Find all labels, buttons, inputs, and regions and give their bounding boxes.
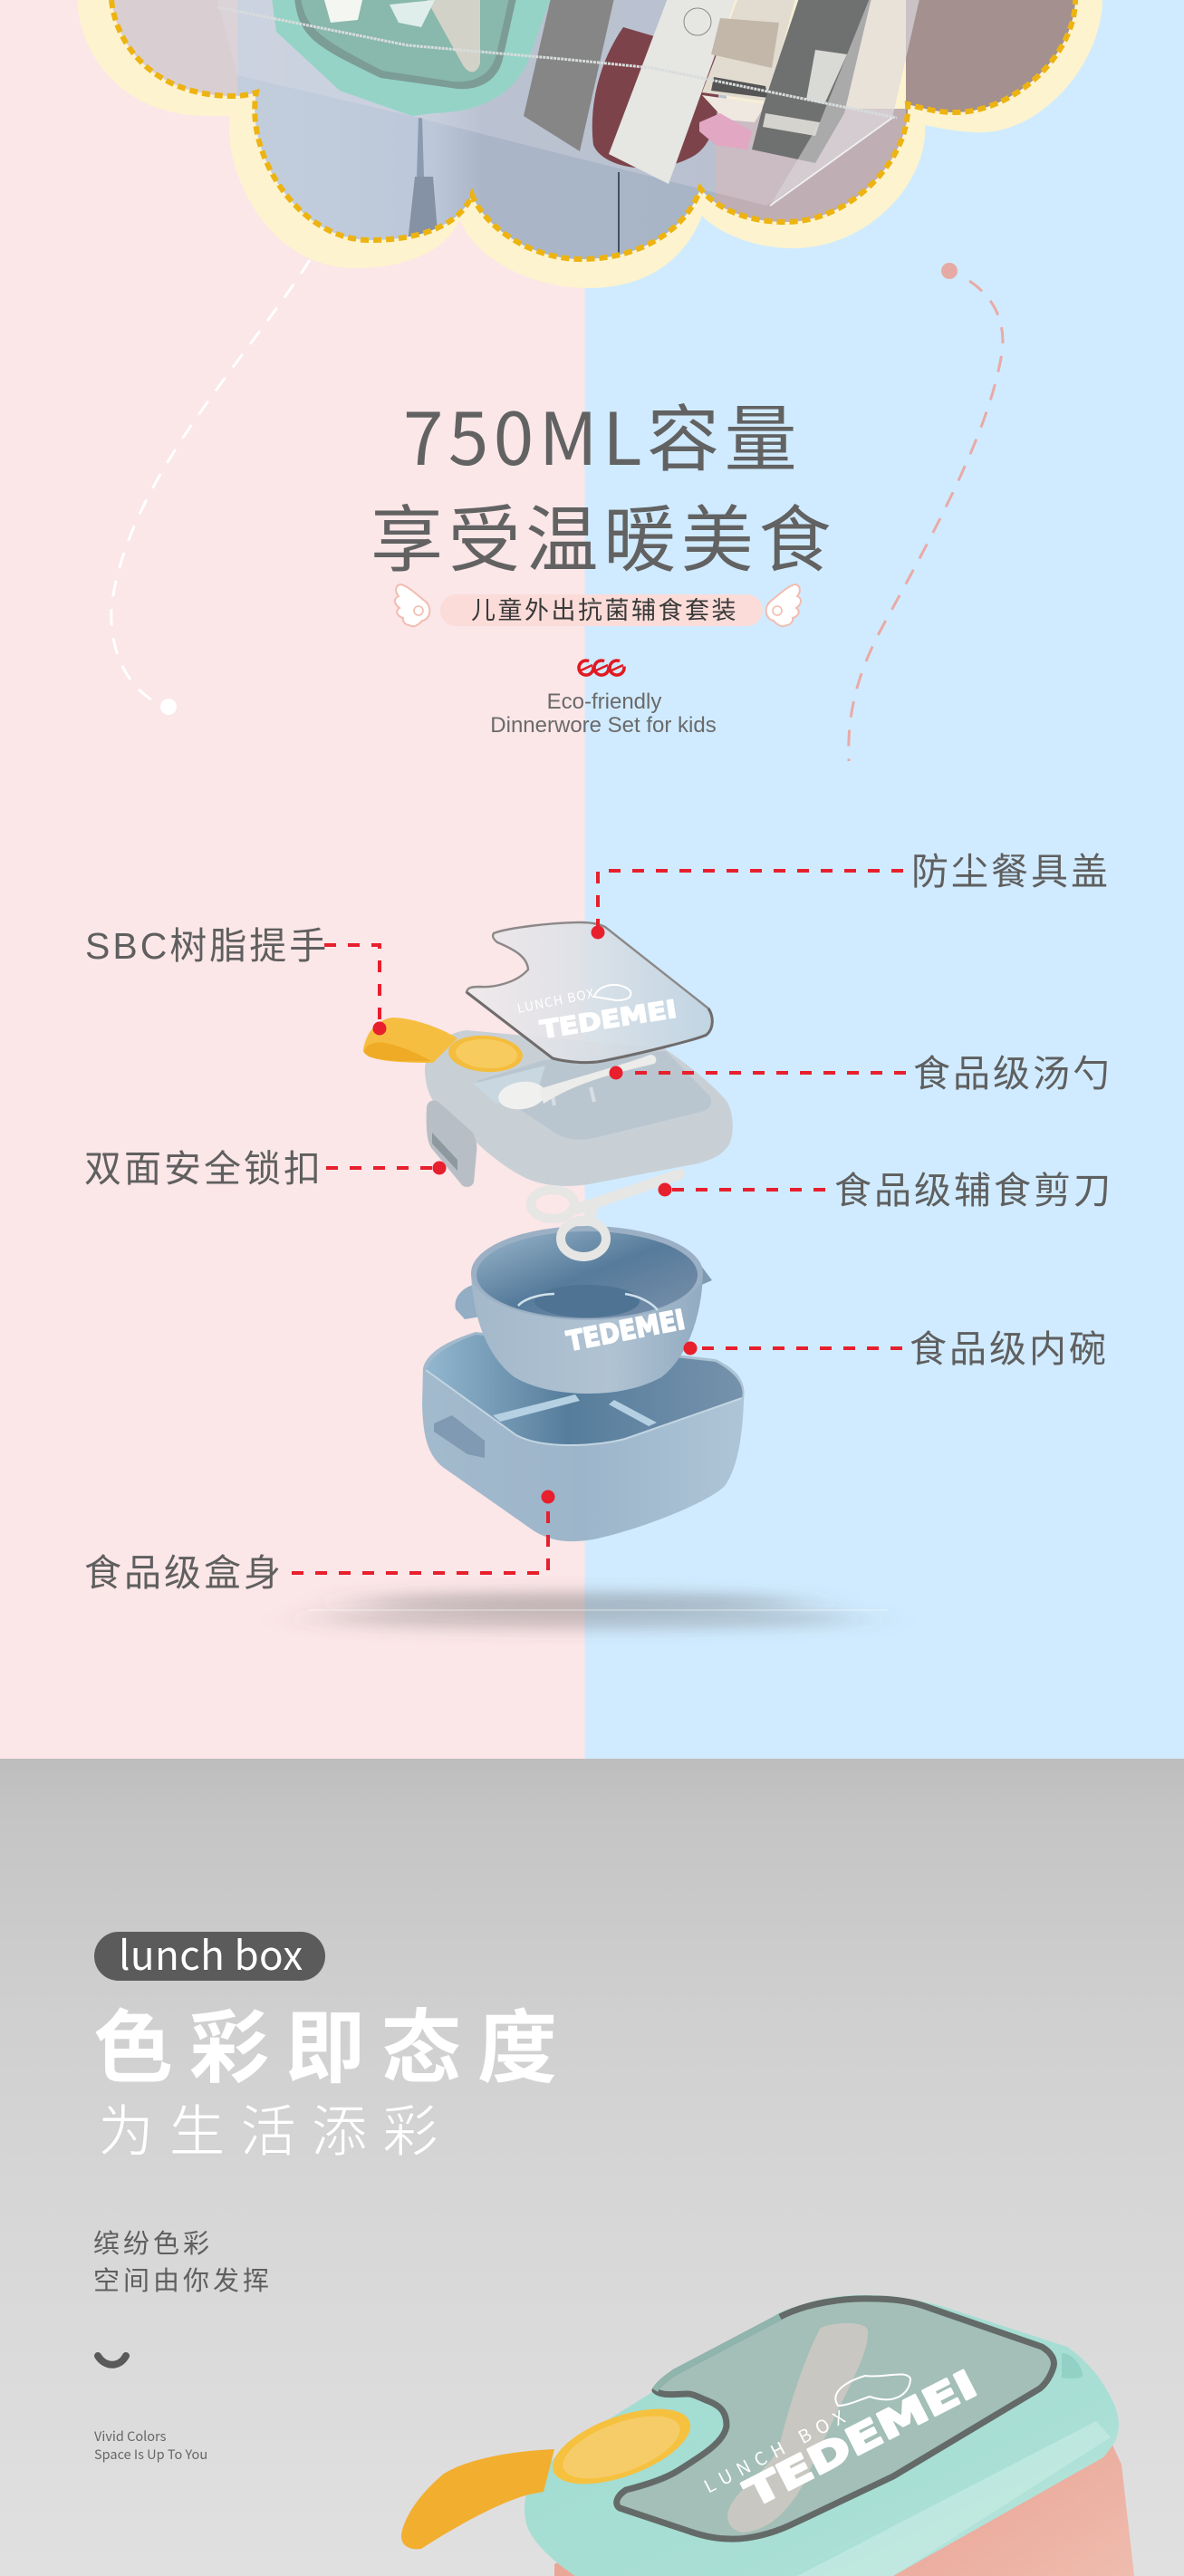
icon: smile (98, 2356, 126, 2365)
lid logo: TEDEMEI (737, 2361, 984, 2516)
exploded product illustration (363, 922, 745, 1541)
decorative white dashed curve with dot (111, 260, 310, 715)
grey lid frame (425, 1030, 733, 1187)
callout: soup spoon (609, 1043, 1112, 1097)
body text: 空间由你发挥 (93, 2260, 273, 2298)
photo: jeans and clear bag (91, 0, 1087, 270)
callout: safety lock: 双面安全锁扣 (84, 1138, 323, 1192)
grey tube (524, 0, 614, 151)
bag zipper (217, 7, 897, 118)
title line two: 享受温暖美食 (371, 482, 836, 587)
title (371, 381, 836, 587)
white tube (609, 0, 736, 184)
side lock (427, 1101, 476, 1187)
subtitle text: 儿童外出抗菌辅食套装 (471, 591, 738, 626)
pill (440, 594, 763, 626)
badge: lunch box: lunch box (119, 1924, 303, 1982)
callout: box body: 食品级盒身 (84, 1542, 284, 1597)
white spoon (496, 1055, 656, 1112)
callout: SBC handle: SBC树脂提手 (85, 925, 329, 967)
english note: Vivid Colors (94, 2426, 167, 2446)
icon: right wing (766, 584, 801, 626)
subtitle pill with wings (395, 584, 801, 626)
english caption: Eco-friendly (547, 690, 661, 714)
clear dust cover: TEDEMEI (538, 996, 679, 1045)
english note: Space Is Up To You (94, 2445, 207, 2464)
clear bag sheet (217, 0, 919, 206)
floor shadow (308, 1592, 888, 1630)
callout: inner bowl: 食品级内碗 (910, 1318, 1109, 1373)
heading: colour is attitude: 色彩即态度 (93, 1984, 573, 2099)
title line one: 750ML容量 (403, 381, 802, 487)
light band on lid edge (797, 2421, 1111, 2576)
callout: box body (84, 1490, 554, 1597)
coral body (892, 2419, 1134, 2576)
subheading: 为生活添彩 (98, 2086, 454, 2167)
callout: safety lock (84, 1138, 446, 1192)
notch (1062, 2353, 1083, 2378)
light upper-left frame edge (655, 2317, 780, 2390)
cream cap (702, 95, 765, 122)
icon: red eco logo (578, 660, 625, 676)
bowl logo: TEDEMEI (564, 1304, 688, 1358)
panel: scalloped photo cloud (77, 0, 1102, 288)
english note (94, 2426, 207, 2464)
callout: inner bowl (683, 1318, 1109, 1373)
box body (422, 1332, 745, 1541)
cream scalloped border (77, 0, 1102, 288)
mint lid (525, 2295, 1119, 2576)
mint lunch box (272, 0, 551, 116)
side clip (434, 1415, 485, 1458)
dark tube with label (752, 0, 871, 163)
yellow pull strap (363, 1018, 524, 1075)
english caption: Dinnerwore Set for kids (490, 713, 717, 738)
callout: scissors (658, 1160, 1113, 1214)
panel: pink and blue split background (0, 0, 1184, 1760)
decorative pink dashed curve with dot (849, 263, 1003, 761)
panel: grey colour section (0, 1759, 1184, 2576)
window glass and frame (617, 2299, 1054, 2539)
body text (93, 2223, 273, 2298)
cream tube with barcode (702, 0, 795, 101)
icon: left wing (395, 584, 429, 626)
callout: SBC handle (85, 925, 386, 1035)
yellow disc (544, 2394, 699, 2499)
callout: soup spoon: 食品级汤勺 (913, 1043, 1112, 1097)
callout: dust cover (591, 841, 1111, 939)
callout: dust cover: 防尘餐具盖 (911, 841, 1111, 895)
inner bowl (455, 1226, 712, 1394)
dark lower rim (467, 992, 712, 1063)
cat icon (835, 2374, 910, 2406)
clear dust cover (467, 922, 712, 1063)
bag side fold (770, 0, 919, 206)
lid lettering: LUNCH BOX (515, 984, 595, 1018)
white scissors (531, 1174, 679, 1257)
spoon under glass (727, 2323, 868, 2533)
body text: 缤纷色彩 (93, 2223, 213, 2261)
yellow dashed outline (111, 0, 1075, 259)
pink cap (699, 113, 752, 150)
product: mint and coral lunch box (401, 2295, 1134, 2576)
maroon pouch (592, 27, 718, 169)
yellow strap (401, 2449, 554, 2549)
lid small text: LUNCH BOX (698, 2403, 850, 2498)
english caption (490, 690, 717, 738)
callout: scissors: 食品级辅食剪刀 (834, 1160, 1113, 1214)
